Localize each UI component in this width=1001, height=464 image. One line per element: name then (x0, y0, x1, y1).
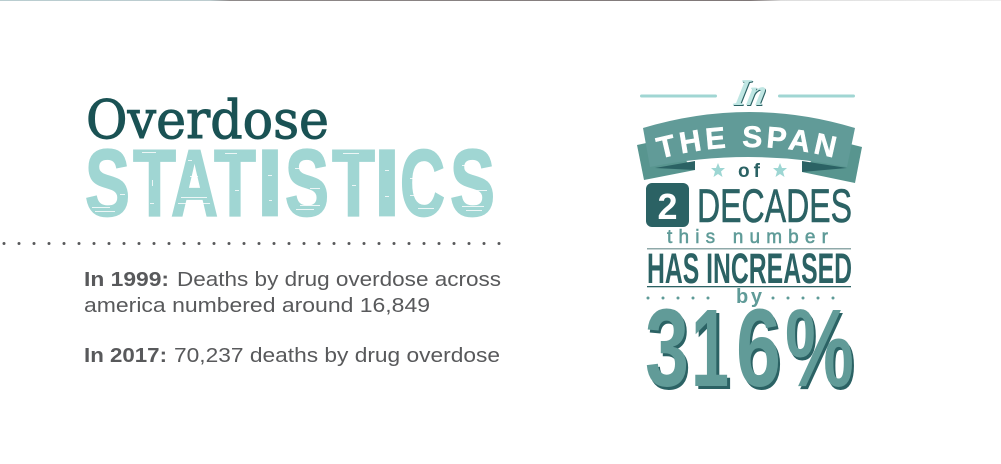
title: STATISTICS: S (450, 130, 495, 236)
ribbon banner: THE SPAN (637, 112, 862, 183)
title: STATISTICS: I (256, 130, 284, 236)
big number: 316% (645, 287, 856, 413)
big number: 316%: 1 (694, 290, 732, 413)
title: STATISTICS: C (400, 130, 445, 236)
text block: 1999 statistic: Deaths by drug overdose across (177, 269, 501, 291)
text block: 1999 statistic: In 1999: (84, 269, 169, 291)
title: STATISTICS: T (133, 130, 176, 236)
big number: 316%: 1 (691, 287, 729, 410)
text: by with dots: by (736, 286, 763, 308)
heading: In, with side rules: In (730, 73, 771, 114)
title: STATISTICS: T (214, 130, 256, 236)
big number: 316%: 3 (645, 287, 689, 410)
title: STATISTICS (85, 130, 495, 236)
big number: 316%: 6 (738, 290, 783, 413)
title: STATISTICS: A (171, 130, 218, 236)
text block: 2017 statistic (84, 345, 500, 367)
text block: 2017 statistic: In 2017: (84, 345, 167, 367)
text block: 1999 statistic (84, 269, 501, 317)
big number: 316%: % (785, 287, 854, 410)
badge: 2: 2 (657, 186, 678, 227)
title: STATISTICS: T (332, 130, 375, 236)
heading: In, with side rules (640, 73, 855, 115)
stars and of: of (738, 161, 761, 182)
title: Overdose: Overdose (86, 90, 329, 151)
stars and of (711, 161, 787, 182)
heading: In, with side rules: In (731, 74, 772, 115)
big number: 316%: 3 (647, 290, 691, 413)
big number: 316%: % (787, 290, 856, 413)
dotted divider (4, 242, 500, 245)
heading: DECADES: DECADES (697, 179, 852, 232)
big number: 316%: 6 (736, 287, 781, 410)
text block: 1999 statistic: america numbered around 16,849 (84, 295, 430, 317)
heading: HAS INCREASED with rules: HAS INCREASED (647, 245, 852, 293)
title: STATISTICS: S (285, 130, 329, 236)
title: STATISTICS: S (85, 130, 130, 236)
text block: 2017 statistic: 70,237 deaths by drug overdose (174, 345, 500, 367)
badge: 2 (646, 183, 689, 227)
text: this number: this number (667, 227, 829, 248)
title: STATISTICS: I (374, 130, 400, 236)
ribbon banner: THE SPAN: THE SPAN (654, 126, 837, 158)
